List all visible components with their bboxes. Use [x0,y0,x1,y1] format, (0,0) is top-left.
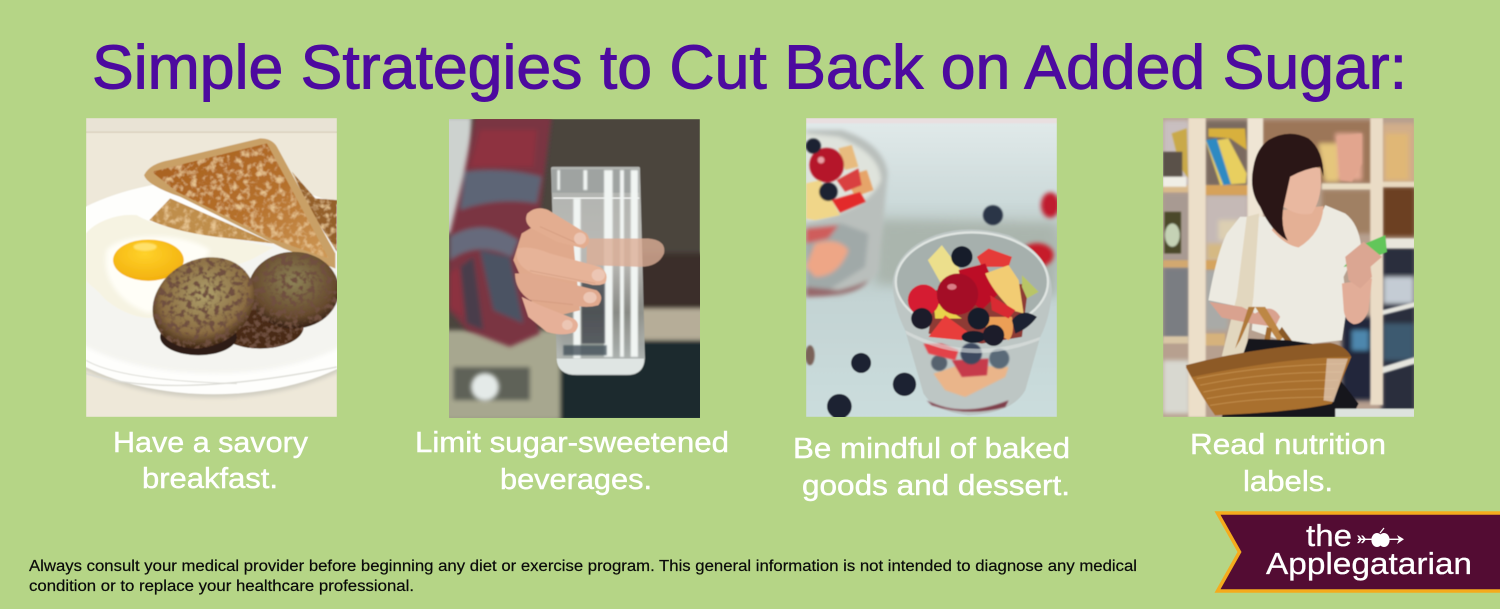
panel: savory breakfast [22,118,405,495]
caption [113,427,309,495]
caption: breakfast. [142,463,278,495]
caption: goods and dessert. [802,470,1070,502]
caption [1190,429,1386,498]
caption: Be mindful of baked [793,433,1070,465]
glass of water [551,167,645,375]
packages [1206,138,1247,185]
posts [1188,118,1206,417]
forearms [1342,279,1372,324]
photo: hand holding a glass of water [449,119,700,418]
icon: apple with arrow [1357,528,1404,547]
bag strap [1222,213,1259,357]
caption: Limit sugar-sweetened [415,427,729,459]
shelves [1163,185,1188,192]
scattered berries [805,192,1060,419]
disclaimer [29,558,1137,595]
logo: the Applegatarian banner [1218,513,1500,591]
photo: toast, egg and sausage on a plate [86,118,337,417]
caption: Read nutrition [1190,429,1386,461]
neck and face [1272,206,1324,247]
disclaimer: condition or to replace your healthcare professional. [29,578,414,595]
hand [513,208,664,334]
panel: baked goods and dessert [793,118,1070,502]
caption: labels. [1243,466,1333,498]
hair [1252,134,1324,241]
logo wordmark: the: the [1306,518,1352,553]
hand with package [1344,235,1387,267]
background glass [806,130,888,297]
panel: sugar-sweetened beverages [415,117,729,496]
logo wordmark: Applegatarian: Applegatarian [1266,546,1472,581]
woman [1208,134,1387,357]
panel: nutrition labels [1163,118,1415,498]
photo: fruit cups on a cloth [806,118,1057,417]
foreground glass of fruit [892,229,1052,415]
caption: Have a savory [113,427,309,459]
title: Simple Strategies to Cut Back on Added Sugar: [92,34,1407,102]
caption [415,427,729,496]
photo: woman reading a label in a store [1163,118,1414,417]
basket [1186,307,1359,417]
shirt [1208,205,1361,345]
caption [793,433,1070,502]
disclaimer: Always consult your medical provider before beginning any diet or exercise program. This general information is not intended to diagnose any medical [29,558,1137,575]
banner ribbon [1218,513,1500,591]
caption: beverages. [500,464,652,496]
